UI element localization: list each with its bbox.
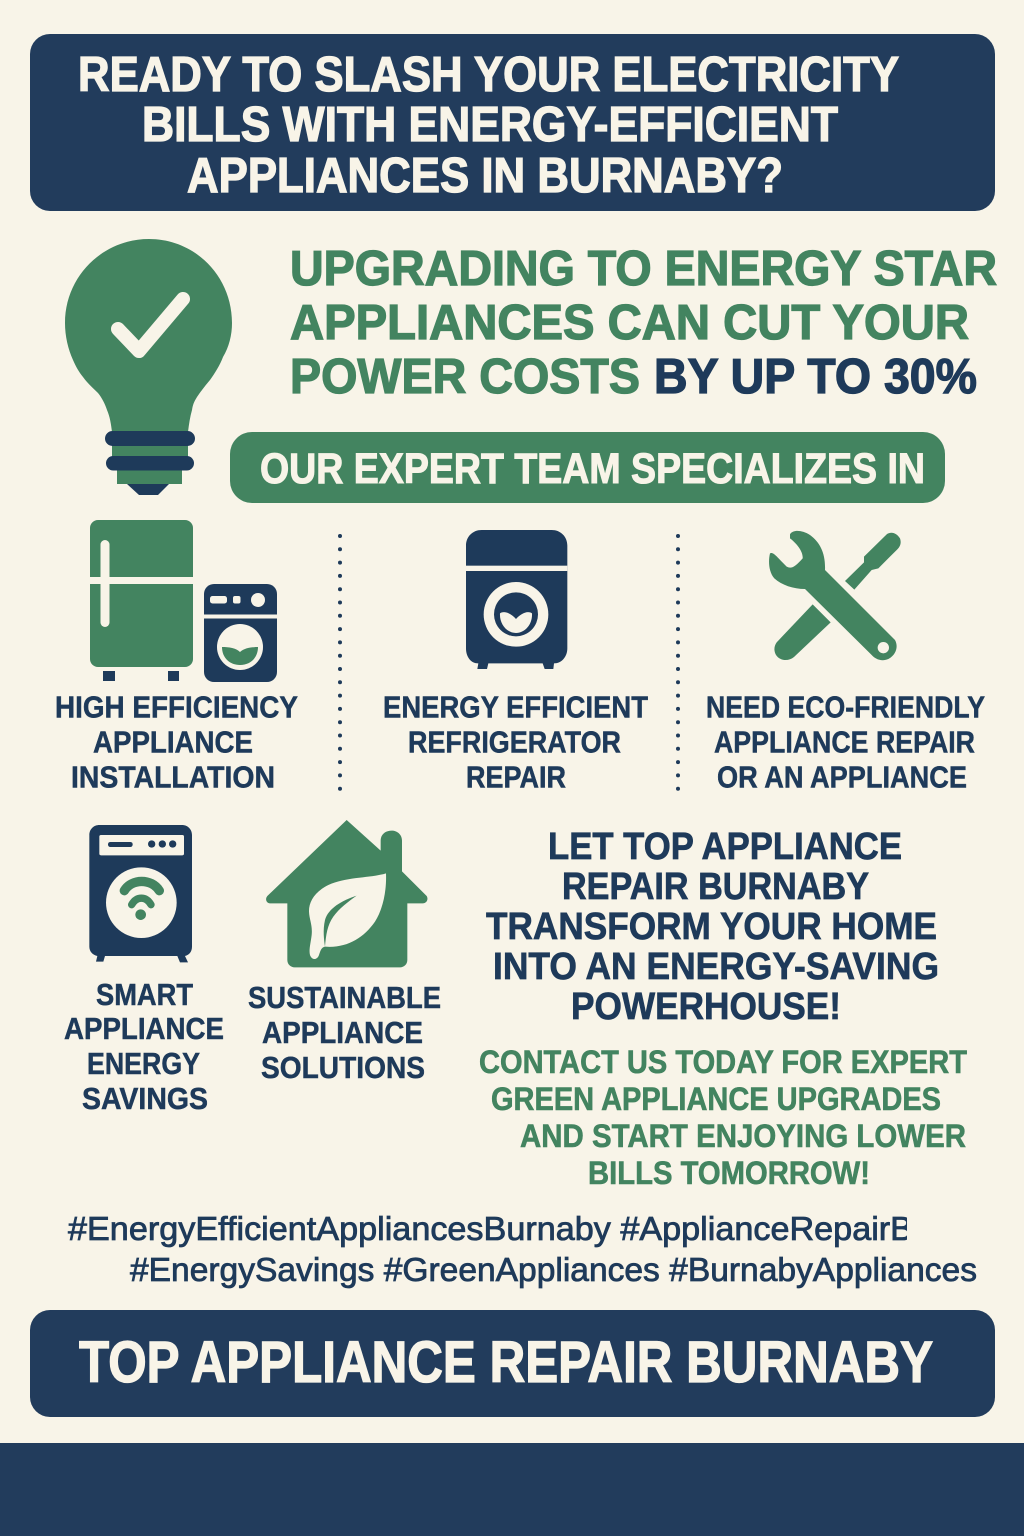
text block: transform your home: INTO AN ENERGY-SAVING (493, 946, 939, 988)
label: smart appliance energy savings (64, 977, 224, 1116)
bottom band (0, 1443, 1024, 1536)
icon: refrigerator repair appliance (466, 530, 567, 669)
text block: transform your home (486, 826, 939, 1028)
text block: transform your home: POWERHOUSE! (571, 986, 841, 1028)
label: need eco-friendly appliance repair: APPLIANCE REPAIR (714, 724, 975, 760)
title banner: APPLIANCES IN BURNABY? (187, 149, 783, 203)
hashtags: #EnergyEfficientAppliancesBurnaby #ApplianceRepairB (68, 1210, 913, 1247)
text block: contact us: AND START ENJOYING LOWER (520, 1118, 966, 1154)
label: sustainable appliance solutions (248, 980, 441, 1085)
text block: transform your home: LET TOP APPLIANCE (548, 826, 902, 868)
title banner: READY TO SLASH YOUR ELECTRICITY (78, 48, 899, 102)
hashtags: #EnergySavings #GreenAppliances #BurnabyAppliances (130, 1251, 977, 1288)
label: smart appliance energy savings: SMART (96, 977, 193, 1012)
label: high efficiency appliance installation: INSTALLATION (71, 760, 275, 794)
label: sustainable appliance solutions: SOLUTIONS (261, 1050, 425, 1085)
label: high efficiency appliance installation (55, 690, 298, 794)
label: high efficiency appliance installation: HIGH EFFICIENCY (55, 690, 298, 724)
label: energy efficient refrigerator repair (383, 690, 648, 794)
pill heading: expert team (230, 432, 945, 503)
label: smart appliance energy savings: SAVINGS (82, 1081, 208, 1116)
label: energy efficient refrigerator repair: REFRIGERATOR (408, 724, 621, 760)
headline: energy star savings: POWER COSTS (290, 350, 640, 404)
icon: house with leaf (266, 820, 427, 967)
headline: energy star savings (290, 242, 997, 404)
icon: wrench and screwdriver (769, 531, 901, 660)
headline: energy star savings: UPGRADING TO ENERGY STAR (290, 242, 997, 296)
text block: contact us (479, 1044, 967, 1191)
label: smart appliance energy savings: APPLIANCE (64, 1011, 224, 1046)
title banner: BILLS WITH ENERGY-EFFICIENT (142, 98, 838, 152)
label: high efficiency appliance installation: APPLIANCE (93, 724, 253, 760)
label: need eco-friendly appliance repair: NEED ECO-FRIENDLY (706, 690, 985, 724)
hashtags (68, 1210, 977, 1288)
label: need eco-friendly appliance repair (706, 690, 985, 794)
text block: contact us: GREEN APPLIANCE UPGRADES (491, 1081, 941, 1117)
pill heading: expert team: OUR EXPERT TEAM SPECIALIZES IN (260, 445, 925, 493)
label: smart appliance energy savings: ENERGY (87, 1046, 200, 1081)
icon: light bulb with check mark (65, 239, 232, 495)
title banner (30, 34, 995, 211)
icon: refrigerator and washer (90, 520, 277, 682)
text block: transform your home: REPAIR BURNABY (562, 866, 869, 908)
label: sustainable appliance solutions: APPLIANCE (262, 1015, 423, 1050)
label: energy efficient refrigerator repair: REPAIR (466, 760, 566, 794)
headline: energy star savings: BY UP TO 30% (654, 350, 977, 404)
label: energy efficient refrigerator repair: ENERGY EFFICIENT (383, 690, 648, 724)
footer banner: company name (30, 1310, 995, 1417)
label: sustainable appliance solutions: SUSTAINABLE (248, 980, 441, 1015)
label: need eco-friendly appliance repair: OR AN APPLIANCE (717, 760, 967, 794)
text block: transform your home: TRANSFORM YOUR HOME (486, 906, 937, 948)
headline: energy star savings: APPLIANCES CAN CUT YOUR (290, 296, 969, 350)
text block: contact us: CONTACT US TODAY FOR EXPERT (479, 1044, 967, 1080)
text block: contact us: BILLS TOMORROW! (588, 1155, 870, 1191)
icon: smart washer with wifi (89, 825, 192, 962)
